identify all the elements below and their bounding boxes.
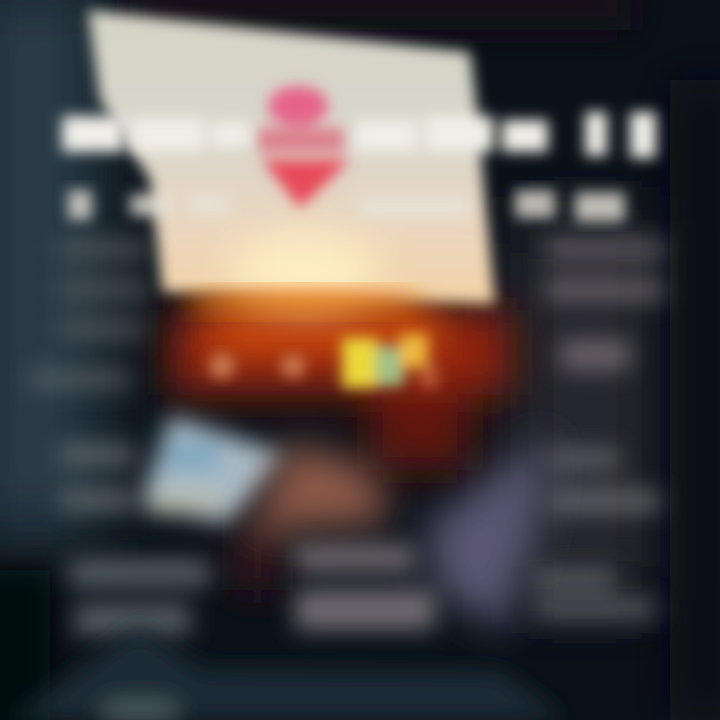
icon: pink heart emblem [258, 86, 350, 208]
text block: right lower [535, 450, 660, 618]
text block: left lower [60, 445, 210, 635]
panel: skin-toned center card [235, 440, 390, 590]
text block: center lower [295, 545, 435, 630]
footer bar [10, 625, 565, 720]
icon: rainbow badge [342, 334, 438, 388]
icon: small dots in the orange band [209, 353, 305, 379]
panel: purple right card [425, 435, 550, 630]
text block: left column upper [30, 240, 150, 388]
panel: light blue card [140, 415, 288, 525]
panel: pale header panel [88, 10, 495, 304]
sun glow [185, 234, 425, 313]
heading: first title line [62, 112, 656, 158]
heading: second title line [68, 190, 625, 222]
text block: right column upper [545, 240, 665, 370]
panel: glowing orange horizon band [170, 300, 510, 470]
